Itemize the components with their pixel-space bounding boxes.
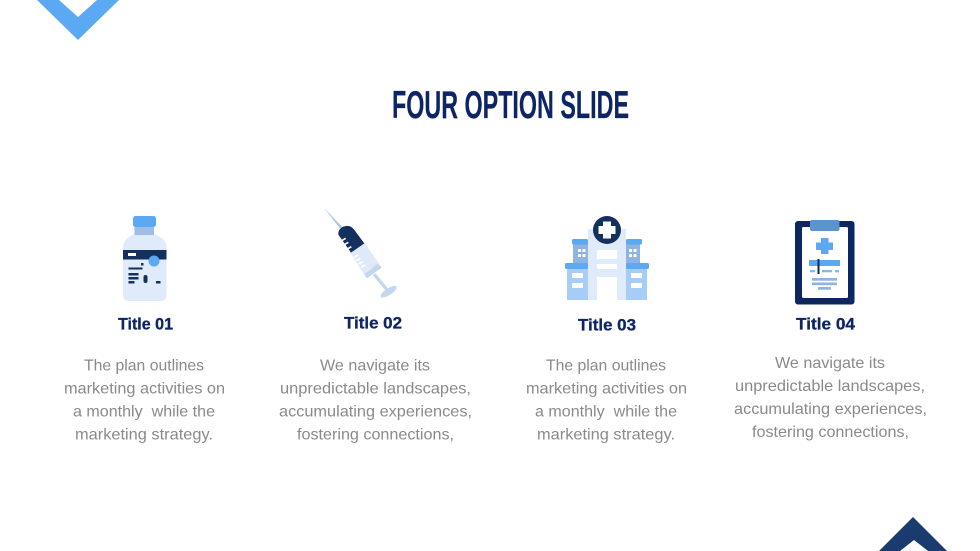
- panel: option 2: [279, 207, 472, 444]
- icon: hospital: [565, 216, 649, 300]
- heading: Title 04: Title 04: [796, 316, 856, 334]
- panel: option 1: [64, 216, 225, 444]
- icon: medicine bottle: [123, 216, 166, 301]
- text block: option 4: [734, 355, 927, 441]
- text block: option 2: accumulating experiences,: [279, 404, 472, 420]
- panel: option 4: [734, 220, 927, 441]
- text block: option 2: We navigate its: [320, 358, 430, 374]
- text block: option 3: marketing activities on: [526, 380, 687, 398]
- text block: option 4: unpredictable landscapes,: [735, 378, 925, 395]
- text block: option 3: The plan outlines: [546, 358, 666, 374]
- heading: Title 03: Title 03: [578, 316, 636, 334]
- text block: option 2: [279, 358, 472, 444]
- panel: option 3: [526, 216, 687, 444]
- text block: option 4: fostering connections,: [752, 424, 909, 441]
- text block: option 4: We navigate its: [775, 355, 885, 372]
- text block: option 1: a monthly while the: [73, 404, 215, 420]
- icon: clipboard: [795, 220, 854, 304]
- text block: option 2: fostering connections,: [297, 426, 454, 444]
- text block: option 1: marketing strategy.: [75, 426, 213, 444]
- text block: option 1: marketing activities on: [64, 380, 225, 398]
- top chevron: [37, 0, 119, 40]
- text block: option 3: [526, 358, 687, 444]
- text block: option 1: The plan outlines: [84, 358, 204, 374]
- text block: option 3: marketing strategy.: [537, 426, 675, 444]
- bottom chevron: [879, 517, 947, 551]
- icon: syringe: [324, 207, 398, 300]
- heading: Title 01: Title 01: [118, 316, 173, 334]
- heading: Title 02: Title 02: [344, 314, 402, 332]
- text block: option 3: a monthly while the: [535, 404, 677, 420]
- text block: option 2: unpredictable landscapes,: [280, 380, 471, 398]
- text block: option 1: [64, 358, 225, 444]
- text block: option 4: accumulating experiences,: [734, 401, 927, 418]
- title: FOUR OPTION SLIDE: [392, 84, 629, 127]
